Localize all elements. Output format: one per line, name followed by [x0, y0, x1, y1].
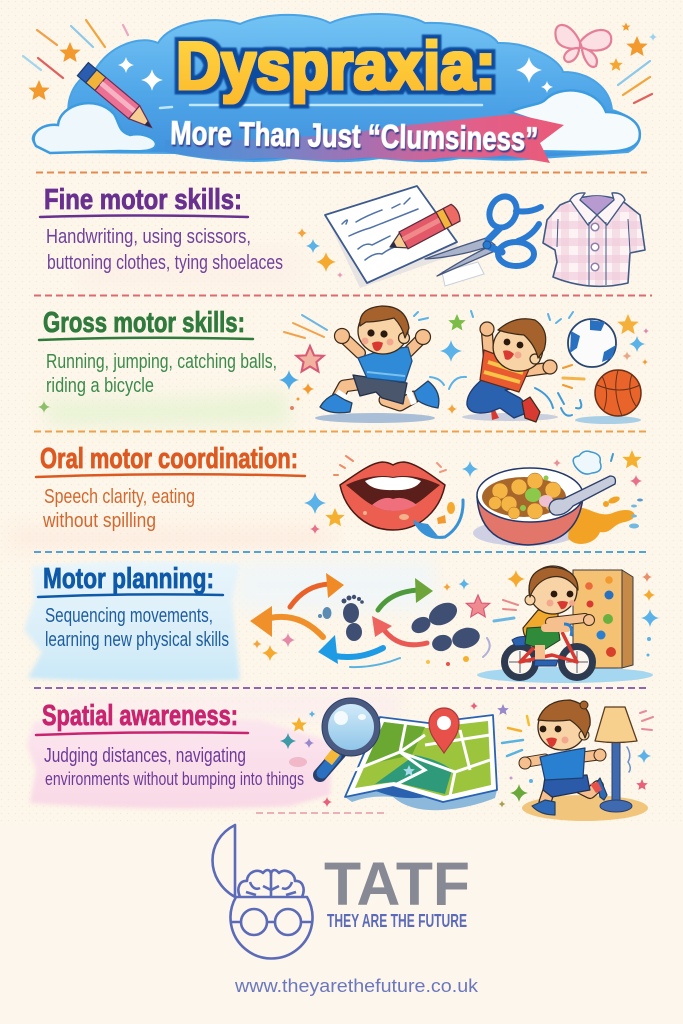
boy jumping in orange: [462, 319, 558, 422]
confetti: gross motor: [279, 315, 327, 410]
body text: oral motor: Speech clarity, eating: [44, 486, 195, 508]
panel: motor planning: [38, 563, 659, 683]
arrow: blue left: [318, 635, 400, 667]
right cloud: [510, 90, 640, 152]
stars and small cloud: oral right: [553, 450, 642, 487]
header banner: [23, 14, 657, 163]
heading: spatial awareness: Spatial awareness:: [42, 700, 238, 732]
arrow: orange left: [250, 606, 323, 637]
floor spot: [522, 795, 648, 821]
panel: gross motor skills: [38, 306, 649, 424]
boy running in blue: [315, 306, 439, 423]
panel: fine motor skills: [40, 184, 645, 288]
main title: Dyspraxia:: [176, 28, 496, 104]
confetti left: [23, 20, 128, 100]
stars around map: [470, 702, 533, 808]
paper scrap under scissors: [442, 262, 484, 286]
arrow: orange up right: [290, 573, 344, 607]
boy with lamp: [519, 700, 607, 815]
white sparkles: [118, 57, 553, 93]
heading: fine motor skills: Fine motor skills:: [44, 184, 242, 216]
marks near lamp: [627, 711, 653, 790]
sparkles: wall right: [641, 572, 659, 656]
body text: fine motor: buttoning clothes, tying shoelaces: [47, 252, 283, 274]
sparkles: fine motor: [297, 228, 343, 278]
body text: motor planning: learning new physical skills: [45, 629, 229, 651]
subtitle: More Than Just “Clumsiness”: [170, 114, 538, 157]
confetti right: [609, 22, 657, 103]
body text: spatial awareness: environments without bumping into things: [45, 769, 304, 789]
panel: spatial awareness: [36, 698, 653, 821]
body text: oral motor: without spilling: [42, 510, 156, 532]
icon: open mouth lips: [340, 462, 445, 530]
body text: gross motor: Running, jumping, catching balls,: [46, 351, 277, 373]
icon: floor lamp: [595, 707, 637, 812]
left cloud: [34, 103, 156, 153]
icon: paper with writing: [325, 186, 462, 288]
butterfly: [555, 25, 611, 67]
dashed dividers: [34, 172, 652, 813]
highlight stripe: [160, 105, 482, 108]
sparkles: motor planning: [252, 570, 525, 666]
logo: TATF: [212, 825, 470, 959]
body text: spatial awareness: Judging distances, navigating: [44, 745, 246, 767]
arrow: red back: [372, 616, 427, 645]
logo wordmark: TATF: [324, 850, 470, 918]
blue floor: [477, 667, 653, 683]
panel: oral motor coordination: [36, 443, 643, 546]
sparkles: oral left: [304, 456, 478, 534]
section tint washes: [10, 250, 435, 808]
ribbon: [165, 114, 564, 163]
arrow: green right: [378, 578, 433, 610]
sparkles: spatial left: [280, 710, 332, 807]
heading: motor planning: Motor planning:: [43, 563, 214, 595]
icon: basketball: [575, 370, 641, 424]
small green sparkle: [38, 401, 50, 413]
boy on bicycle: [504, 566, 594, 678]
body text: fine motor: Handwriting, using scissors,: [46, 226, 251, 248]
logo icon: open head with brain and glasses: [212, 825, 313, 959]
cloud banner shape: [33, 14, 640, 161]
body text: gross motor: riding a bicycle: [46, 375, 154, 397]
logo tagline: THEY ARE THE FUTURE: [327, 911, 467, 931]
icon: scissors: [425, 192, 541, 276]
heading: oral motor coordination: Oral motor coordination:: [40, 443, 298, 475]
icon: pencil: [386, 203, 462, 256]
body text: motor planning: Sequencing movements,: [45, 605, 213, 627]
website url: www.theyarethefuture.co.uk: [234, 976, 479, 996]
icon: footprints: [318, 595, 482, 653]
icon: map: [345, 708, 497, 810]
icon: spilled cereal bowl: [473, 468, 643, 546]
icon: checked shirt: [543, 193, 645, 286]
heading: gross motor skills: Gross motor skills:: [43, 307, 245, 339]
icon: speech swoosh: [415, 500, 463, 537]
sparkles between boys: [414, 311, 473, 414]
icon: climbing wall: [573, 570, 633, 668]
icon: soccer ball: [568, 319, 616, 367]
icon: magnifying glass: [320, 698, 380, 775]
pencil: [77, 63, 157, 134]
motion lines and sparkles near balls: [535, 312, 649, 416]
